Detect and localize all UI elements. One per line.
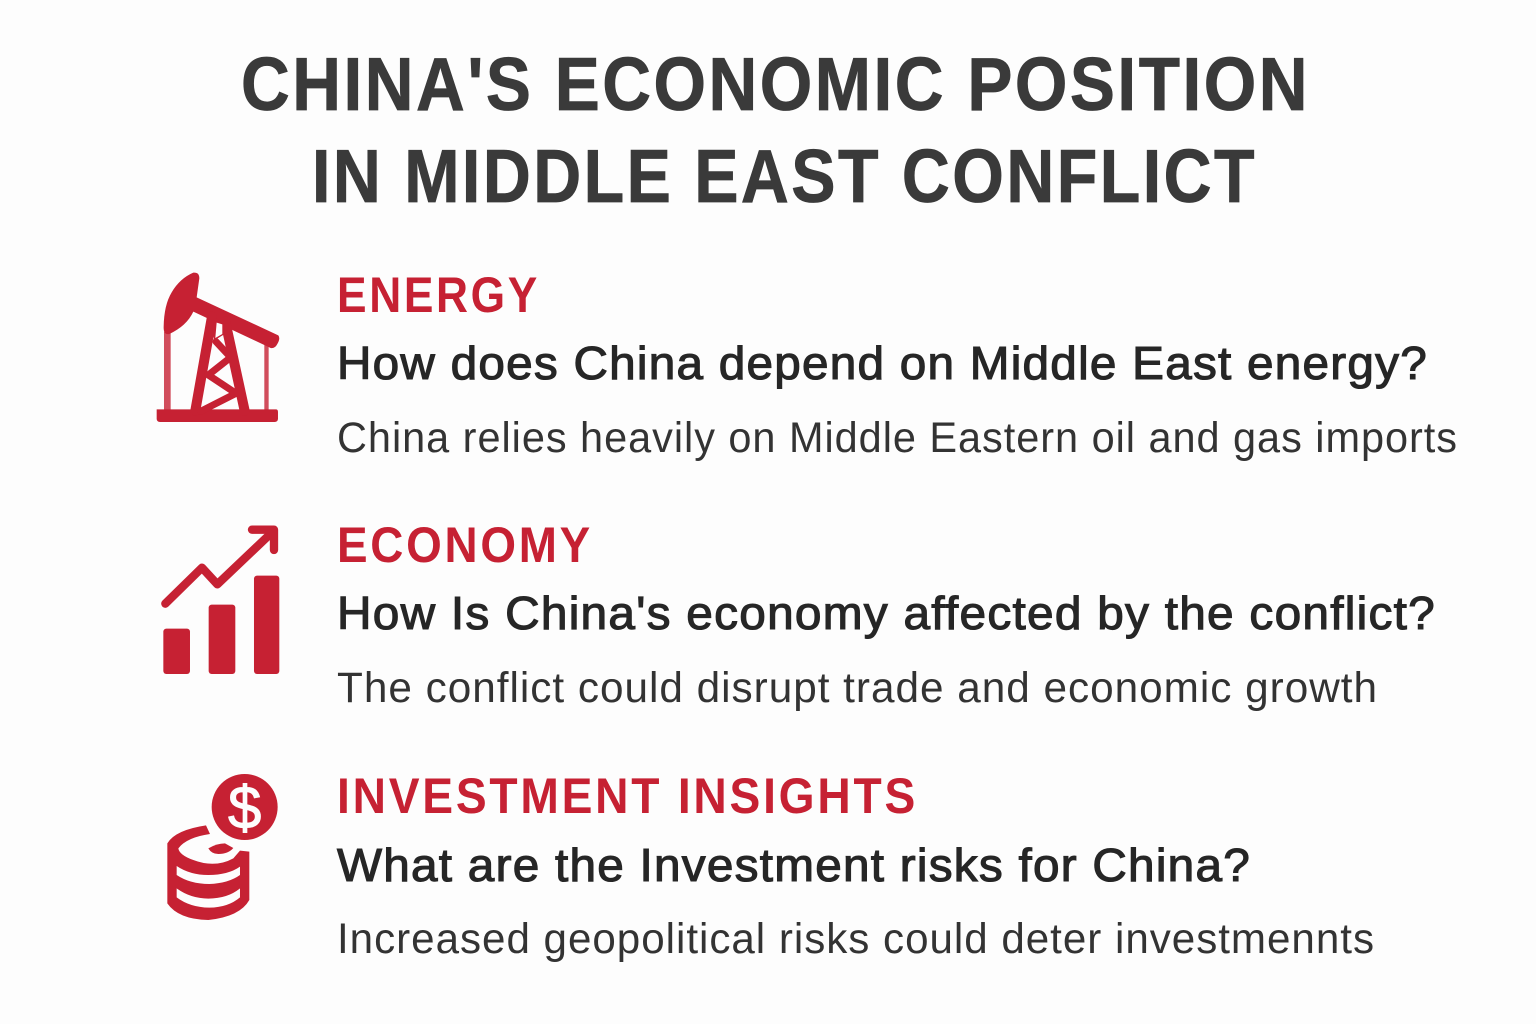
question: investment insights: What are the Investment risks for China? xyxy=(337,839,1251,891)
panel: energy xyxy=(157,267,1458,462)
question: energy: How does China depend on Middle East energy? xyxy=(337,337,1428,389)
heading: investment insights: INVESTMENT INSIGHTS xyxy=(337,768,918,824)
panel: economy xyxy=(163,517,1436,712)
title: CHINA'S ECONOMIC POSITION xyxy=(241,42,1310,126)
heading: energy: ENERGY xyxy=(337,267,540,323)
heading: economy: ECONOMY xyxy=(337,517,593,573)
title: IN MIDDLE EAST CONFLICT xyxy=(312,134,1257,218)
description: economy: The conflict could disrupt trade and economic growth xyxy=(337,664,1378,712)
icon: coins and dollar: $ xyxy=(228,774,261,841)
description: investment insights: Increased geopolitical risks could deter investmennts xyxy=(337,915,1375,963)
description: energy: China relies heavily on Middle Eastern oil and gas imports xyxy=(337,414,1458,462)
title xyxy=(241,42,1310,218)
icon: oil pump xyxy=(157,273,279,422)
icon: coins and dollar xyxy=(167,774,278,920)
question: economy: How Is China's economy affected by the conflict? xyxy=(337,587,1436,639)
icon: growth chart xyxy=(163,530,279,674)
panel: investment insights xyxy=(167,768,1375,963)
